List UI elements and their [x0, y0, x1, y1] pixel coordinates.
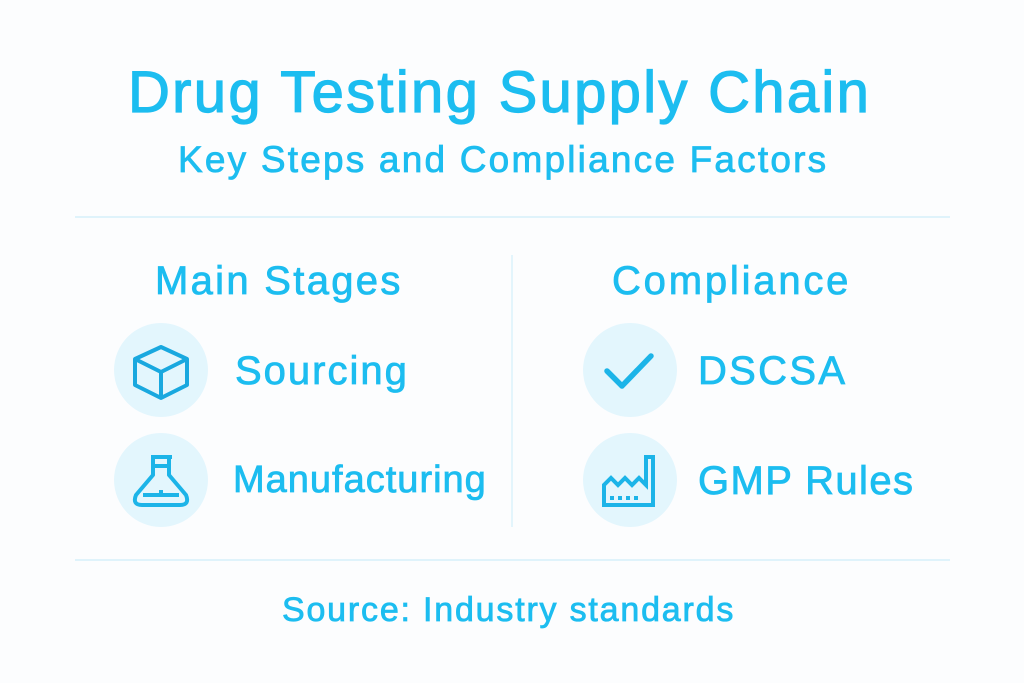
- heading: main stages: Main Stages: [155, 259, 403, 303]
- subtitle: Key Steps and Compliance Factors: [178, 139, 828, 180]
- icon: box: [114, 323, 208, 417]
- icon: check: [583, 323, 677, 417]
- label: GMP rules: GMP Rules: [698, 459, 914, 503]
- title: Drug Testing Supply Chain: [128, 60, 871, 125]
- heading: compliance: Compliance: [612, 259, 851, 303]
- icon: flask: [114, 433, 208, 527]
- label: DSCSA: DSCSA: [698, 349, 847, 393]
- label: manufacturing: Manufacturing: [233, 459, 487, 501]
- source: Source: Industry standards: [282, 591, 735, 629]
- label: sourcing: Sourcing: [235, 349, 409, 393]
- icon: factory: [583, 433, 677, 527]
